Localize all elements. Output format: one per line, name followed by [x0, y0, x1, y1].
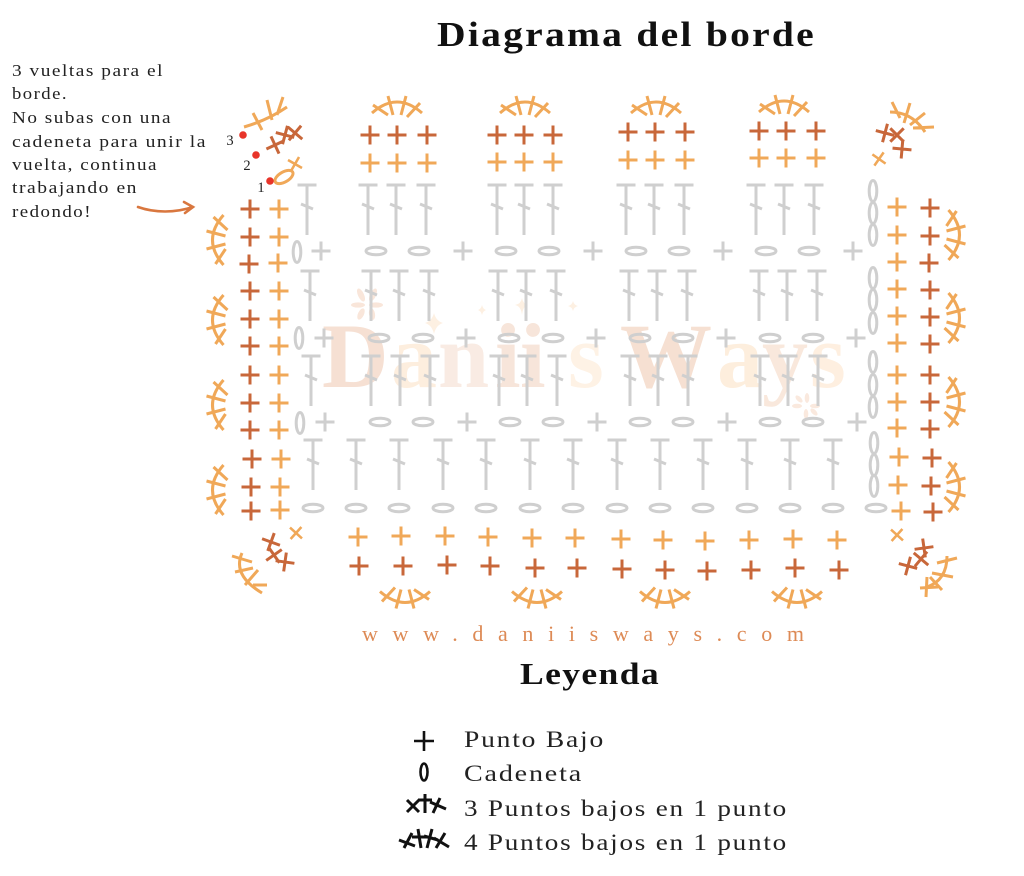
watermark wordmark: s [568, 305, 627, 407]
double crochet row 1 [298, 185, 824, 235]
marker 3: 3 [226, 133, 234, 149]
legend item: 3 puntos bajos: 3 Puntos bajos en 1 punto [464, 796, 788, 821]
watermark wordmark: a [391, 305, 437, 407]
chain and single crochet row 3 [296, 412, 866, 434]
legend item: 3 puntos bajos [407, 794, 788, 821]
watermark wordmark: a [717, 305, 763, 407]
legend item: punto bajo [414, 727, 605, 752]
light corner fan top left [244, 97, 287, 130]
watermark sparkles [425, 298, 578, 334]
dark corner top left [262, 120, 308, 158]
dark top rows [360, 122, 826, 144]
legend item: cadeneta: Cadeneta [464, 761, 583, 786]
watermark [322, 287, 846, 419]
double crochet row 4 [304, 440, 842, 490]
dark left column [240, 200, 262, 520]
watermark wordmark: W [620, 305, 712, 407]
round 1 and 3: light stitches [206, 95, 966, 608]
watermark wordmark: D [322, 305, 388, 407]
legend item: 4 puntos bajos [399, 829, 788, 855]
dark bottom row [350, 556, 848, 580]
round 2: dark single crochet [240, 120, 942, 581]
light fans bottom [380, 588, 822, 608]
text block: instructions note: 3 vueltas para el [12, 61, 164, 80]
dark corner bottom left [259, 530, 296, 573]
text block: instructions note: No subas con una [12, 108, 172, 127]
chain and single crochet row 1 [293, 242, 862, 262]
light right column [888, 198, 910, 520]
text block: instructions note: cadeneta para unir la [12, 132, 207, 151]
legend [399, 727, 788, 855]
title: Diagrama del borde [437, 15, 816, 54]
legend item: cadeneta [420, 761, 583, 786]
text block: instructions note: trabajando en [12, 178, 138, 197]
light corner stitches [273, 148, 908, 546]
dark corner bottom right [896, 537, 935, 578]
watermark wordmark: n [438, 305, 489, 407]
light bottom row [348, 526, 846, 550]
light fans right [944, 210, 966, 512]
double crochet row 2 [300, 271, 826, 321]
watermark flower right [792, 393, 820, 419]
text block: instructions note: redondo! [12, 202, 92, 221]
arrow [138, 202, 193, 213]
watermark flower left [351, 287, 383, 321]
watermark wordmark: i [520, 305, 546, 407]
light fans top [372, 95, 809, 117]
light top rows [360, 148, 826, 172]
chart: base gray stitches [293, 180, 886, 512]
double crochet row 3 [302, 356, 828, 406]
marker 1: 1 [257, 180, 265, 196]
website url: www.daniisways.com [362, 621, 804, 646]
light corner fan top right [890, 102, 934, 132]
text block: instructions note [12, 61, 207, 221]
watermark wordmark: s [810, 305, 846, 407]
legend heading: Leyenda [520, 656, 660, 691]
round markers [226, 131, 274, 196]
light left column [268, 200, 290, 520]
light fans left [206, 215, 228, 515]
marker 2: 2 [243, 158, 251, 174]
chain and single crochet row 2 [295, 328, 866, 348]
legend item: 4 puntos bajos: 4 Puntos bajos en 1 punto [464, 830, 788, 855]
text block: instructions note: vuelta, continua [12, 155, 158, 174]
dark corner top right [873, 121, 912, 159]
light corner fan bottom left [232, 553, 267, 593]
light corner fan bottom right [920, 556, 957, 597]
text block: instructions note: borde. [12, 84, 68, 103]
watermark wordmark: y [762, 305, 808, 407]
watermark wordmark: i [495, 305, 521, 407]
legend item: punto bajo: Punto Bajo [464, 727, 605, 752]
dark right column [920, 198, 942, 522]
foundation chain [303, 504, 886, 512]
right vertical chains [869, 180, 878, 496]
